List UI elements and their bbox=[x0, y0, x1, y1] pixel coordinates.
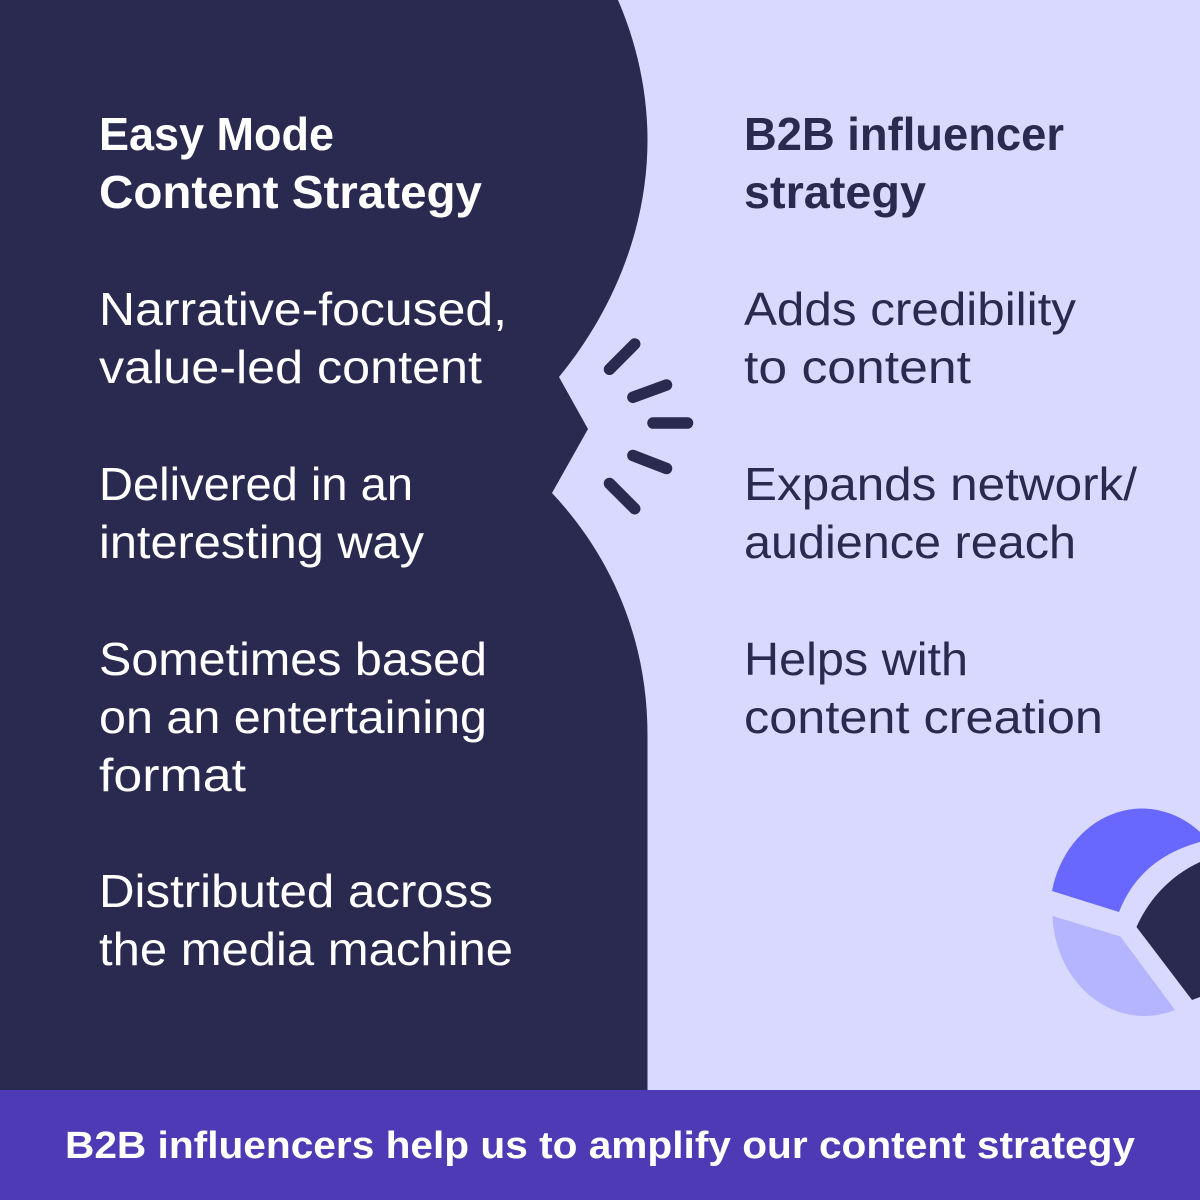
pie slice: dark bbox=[1136, 862, 1200, 1000]
text: entertaining format: on an entertaining bbox=[99, 691, 487, 743]
text: credibility: Adds credibility bbox=[744, 283, 1076, 335]
text: content creation: Helps with bbox=[744, 633, 968, 685]
text: delivered: interesting way bbox=[99, 516, 424, 568]
text: delivered bbox=[99, 458, 424, 568]
heading: B2B influencer strategy: B2B influencer bbox=[744, 108, 1064, 160]
icon: emphasis burst lines bbox=[610, 344, 688, 509]
text: narrative-focused bbox=[99, 283, 507, 393]
text: network reach: Expands network/ bbox=[744, 458, 1137, 510]
text: narrative-focused: value-led content bbox=[99, 341, 482, 393]
heading: Easy Mode Content Strategy: Content Strategy bbox=[99, 166, 482, 218]
text: delivered: Delivered in an bbox=[99, 458, 413, 510]
heading: Easy Mode Content Strategy bbox=[99, 108, 482, 218]
text: entertaining format: format bbox=[99, 749, 246, 801]
text: network reach bbox=[744, 458, 1137, 568]
footer text: B2B influencers help us to amplify our content strategy bbox=[65, 1125, 1135, 1167]
pie slice: blue bbox=[1052, 809, 1200, 912]
text: network reach: audience reach bbox=[744, 516, 1076, 568]
heading: B2B influencer strategy: strategy bbox=[744, 166, 926, 218]
text: narrative-focused: Narrative-focused, bbox=[99, 283, 507, 335]
text: distributed bbox=[99, 865, 513, 975]
text: credibility bbox=[744, 283, 1076, 393]
text: distributed: the media machine bbox=[99, 923, 513, 975]
text: entertaining format: Sometimes based bbox=[99, 633, 487, 685]
text: content creation bbox=[744, 633, 1103, 743]
text: content creation: content creation bbox=[744, 691, 1103, 743]
icon: pie chart bbox=[1052, 809, 1200, 1016]
heading: Easy Mode Content Strategy: Easy Mode bbox=[99, 108, 334, 160]
footer banner bbox=[0, 1090, 1200, 1200]
pie slice: lilac bbox=[1052, 916, 1175, 1016]
text: distributed: Distributed across bbox=[99, 865, 493, 917]
text: credibility: to content bbox=[744, 341, 971, 393]
heading: B2B influencer strategy bbox=[744, 108, 1064, 218]
panel: dark speech shape bbox=[0, 0, 648, 1090]
text: entertaining format bbox=[99, 633, 487, 801]
